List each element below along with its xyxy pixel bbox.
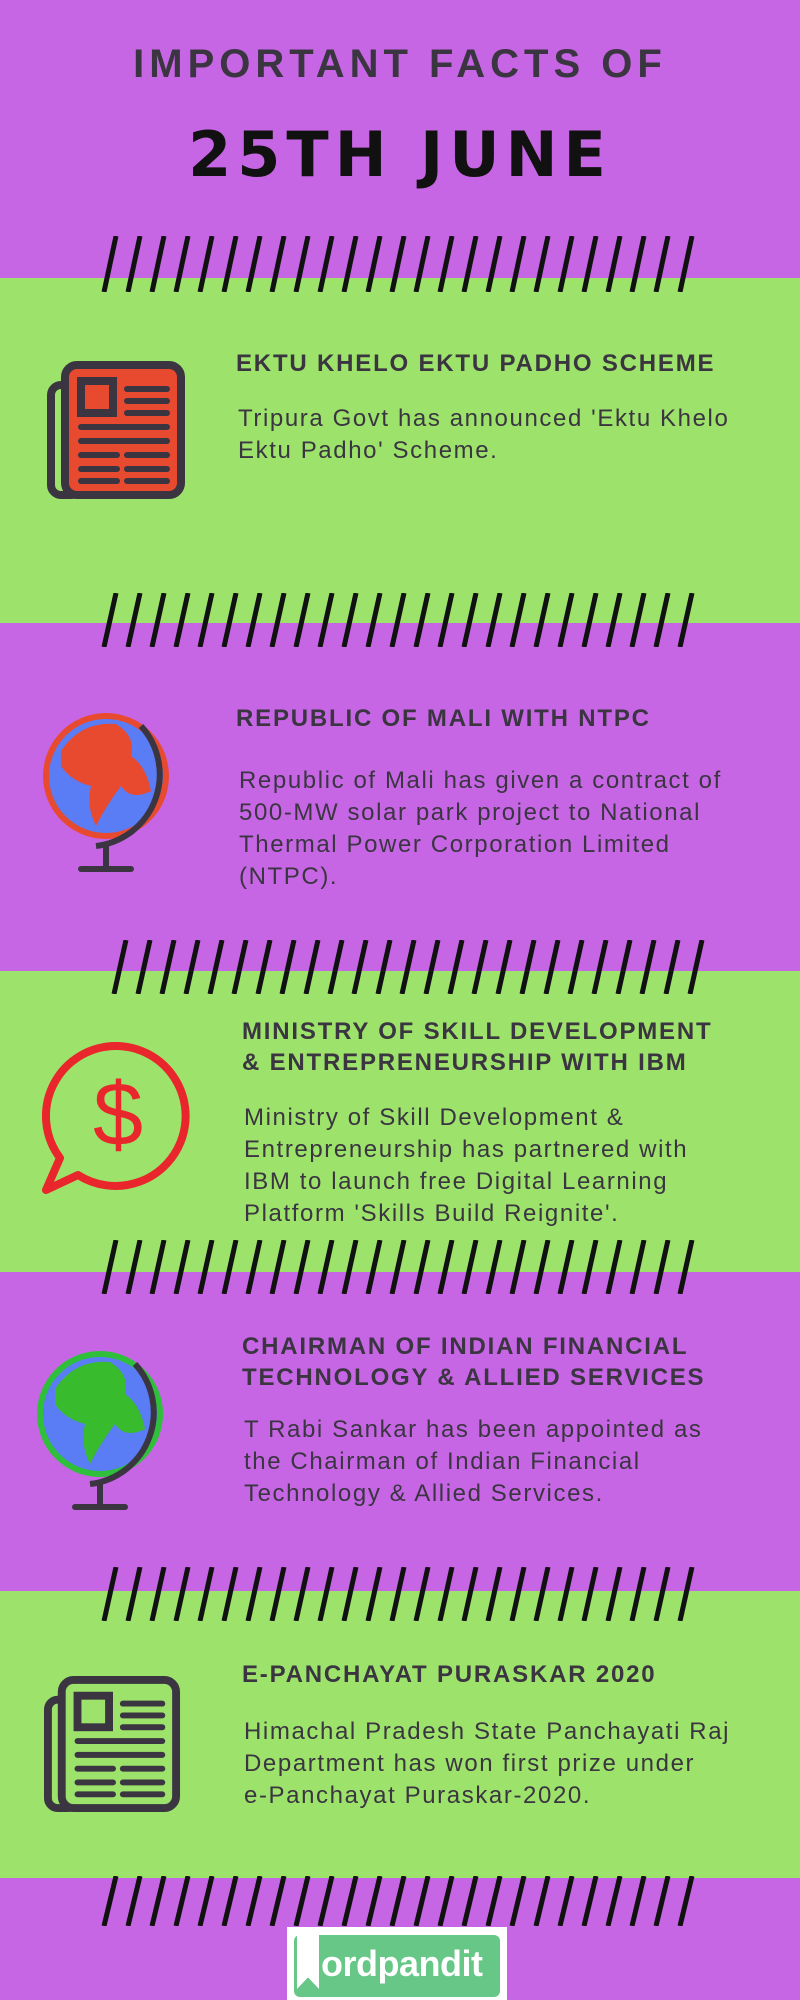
stripes 1 [102,236,694,292]
stripes 2 [102,593,694,647]
text 3: Entrepreneurship has partnered with [244,1136,688,1163]
text 1: Tripura Govt has announced 'Ektu Khelo [238,405,729,432]
subtitle date: 25TH JUNE [188,118,612,191]
icon: dollar speech bubble [42,1042,190,1194]
text 2: Republic of Mali has given a contract of [239,767,722,794]
text 5 [244,1718,730,1809]
text 4: the Chairman of Indian Financial [244,1448,641,1475]
logo: wordpandit [287,1927,507,2000]
stripes 6 [102,1876,694,1926]
text 5: Himachal Pradesh State Panchayati Raj [244,1718,730,1745]
text 4: T Rabi Sankar has been appointed as [244,1416,703,1443]
heading 2: REPUBLIC OF MALI WITH NTPC [236,705,651,732]
stripes 3 [112,940,704,994]
heading 3: MINISTRY OF SKILL DEVELOPMENT [242,1018,712,1045]
icon: dark newspaper [44,1676,180,1812]
stripes 5 [102,1567,694,1621]
icon: green globe [37,1351,163,1510]
heading 1: EKTU KHELO EKTU PADHO SCHEME [236,350,715,377]
text 1: Ektu Padho' Scheme. [238,437,498,464]
text 3 [244,1104,688,1227]
heading 5: E-PANCHAYAT PURASKAR 2020 [242,1661,656,1688]
stripes 4 [102,1240,694,1294]
heading 4: TECHNOLOGY & ALLIED SERVICES [242,1364,705,1391]
green band 1 [0,278,800,623]
text 1 [238,405,729,464]
text 2: (NTPC). [239,863,338,890]
heading 4: CHAIRMAN OF INDIAN FINANCIAL [242,1333,688,1360]
text 2 [239,767,722,890]
logo: wordpandit: ordpandit [321,1943,482,1984]
text 3: Platform 'Skills Build Reignite'. [244,1200,619,1227]
heading 3: & ENTREPRENEURSHIP WITH IBM [242,1049,688,1076]
icon: red globe [43,713,169,872]
text 5: Department has won first prize under [244,1750,695,1777]
text 2: Thermal Power Corporation Limited [239,831,671,858]
heading 4 [242,1333,705,1391]
green band 2 [0,971,800,1272]
icon: red newspaper [47,361,185,499]
green band 3 [0,1591,800,1878]
text 4 [244,1416,703,1507]
icon: dollar speech bubble: $ [93,1065,143,1165]
text 4: Technology & Allied Services. [244,1480,604,1507]
title: IMPORTANT FACTS OF [133,42,667,86]
text 5: e-Panchayat Puraskar-2020. [244,1782,591,1809]
text 3: IBM to launch free Digital Learning [244,1168,668,1195]
text 2: 500-MW solar park project to National [239,799,701,826]
text 3: Ministry of Skill Development & [244,1104,624,1131]
heading 3 [242,1018,712,1076]
